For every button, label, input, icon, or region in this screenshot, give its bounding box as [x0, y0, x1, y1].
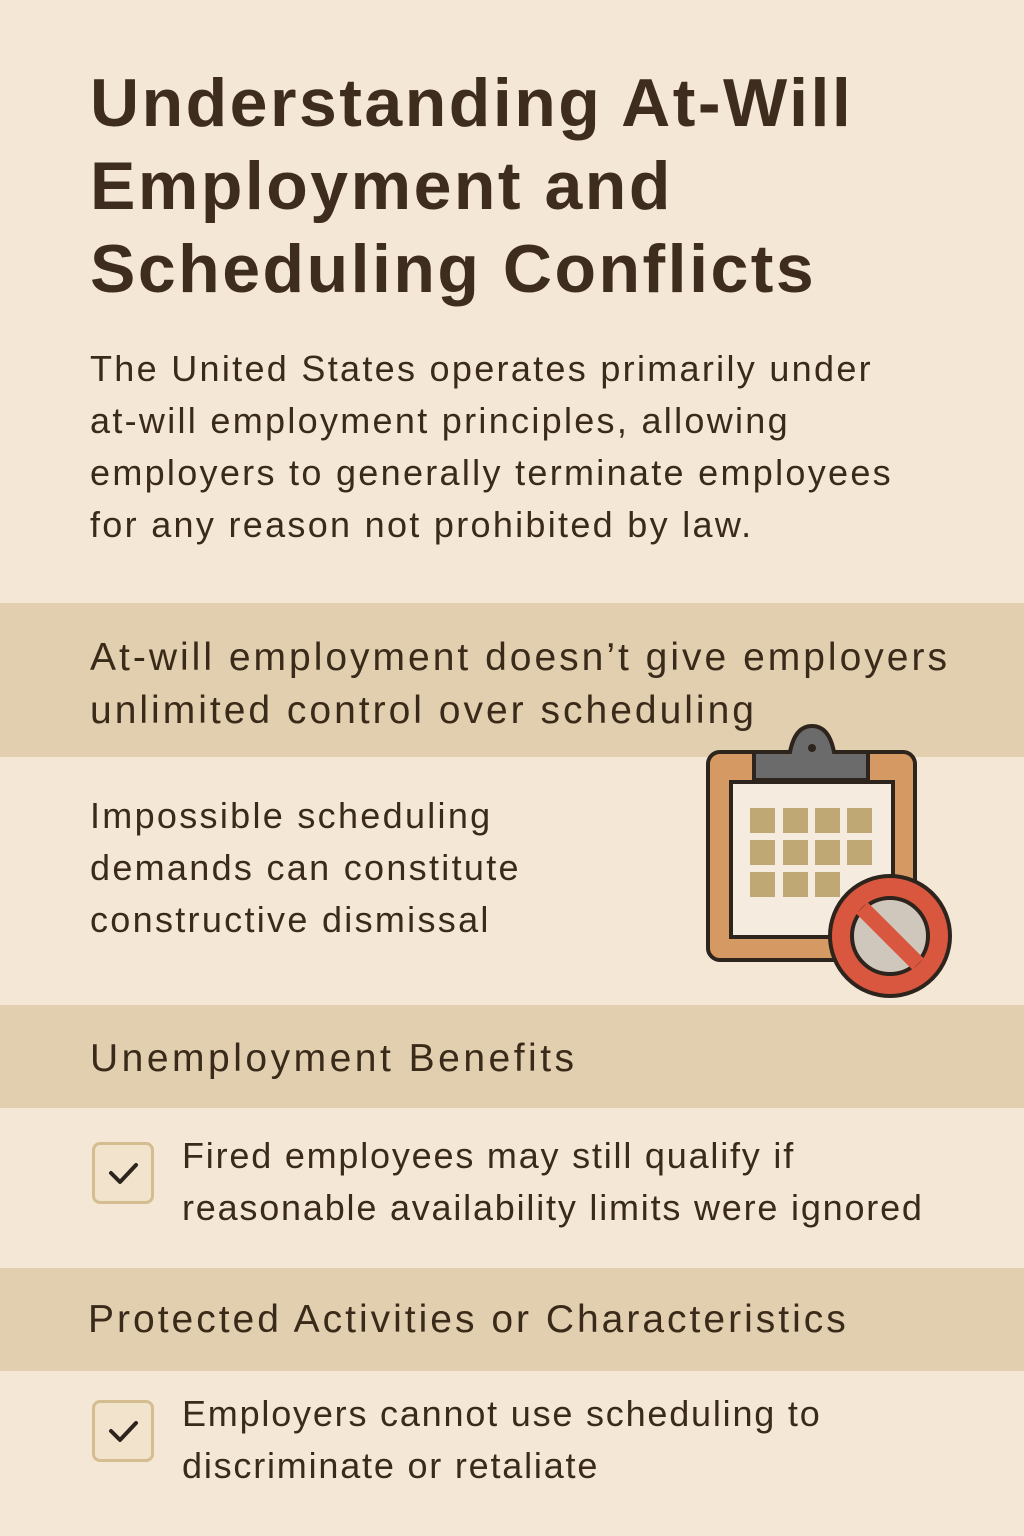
- band: unemployment benefits heading: Unemployment Benefits: [90, 1037, 578, 1080]
- panel text: constructive dismissal: constructive dismissal: [90, 899, 491, 940]
- item: protected activities: Employers cannot use scheduling to: [182, 1393, 822, 1434]
- item: protected activities: discriminate or retaliate: [182, 1445, 599, 1486]
- title: Employment and: [90, 148, 673, 224]
- band: unemployment benefits heading: [0, 1005, 1024, 1108]
- item: unemployment benefits: Fired employees may still qualify if: [182, 1135, 795, 1176]
- band: scheduling heading: At-will employment doesn’t give employers: [90, 636, 950, 679]
- title: Understanding At-Will: [90, 65, 853, 141]
- panel text: constructive dismissal: [90, 795, 521, 940]
- intro text: at-will employment principles, allowing: [90, 400, 790, 441]
- icon: checkbox: [92, 1142, 154, 1204]
- panel text: constructive dismissal: demands can constitute: [90, 847, 521, 888]
- band: scheduling heading: [0, 603, 1024, 757]
- intro text: The United States operates primarily under: [90, 348, 873, 389]
- item: unemployment benefits: [92, 1135, 924, 1228]
- panel text: constructive dismissal: Impossible scheduling: [90, 795, 492, 836]
- icon: clipboard calendar with prohibition: [706, 724, 952, 998]
- intro text: employers to generally terminate employees: [90, 452, 893, 493]
- band: scheduling heading: unlimited control over scheduling: [90, 689, 757, 732]
- title: [90, 65, 853, 307]
- intro text: for any reason not prohibited by law.: [90, 504, 753, 545]
- intro text: [90, 348, 893, 545]
- item: protected activities: [92, 1393, 822, 1486]
- icon: checkbox: [92, 1400, 154, 1462]
- title: Scheduling Conflicts: [90, 231, 816, 307]
- band: protected activities heading: Protected Activities or Characteristics: [88, 1298, 849, 1341]
- item: unemployment benefits: reasonable availability limits were ignored: [182, 1187, 924, 1228]
- band: protected activities heading: [0, 1268, 1024, 1371]
